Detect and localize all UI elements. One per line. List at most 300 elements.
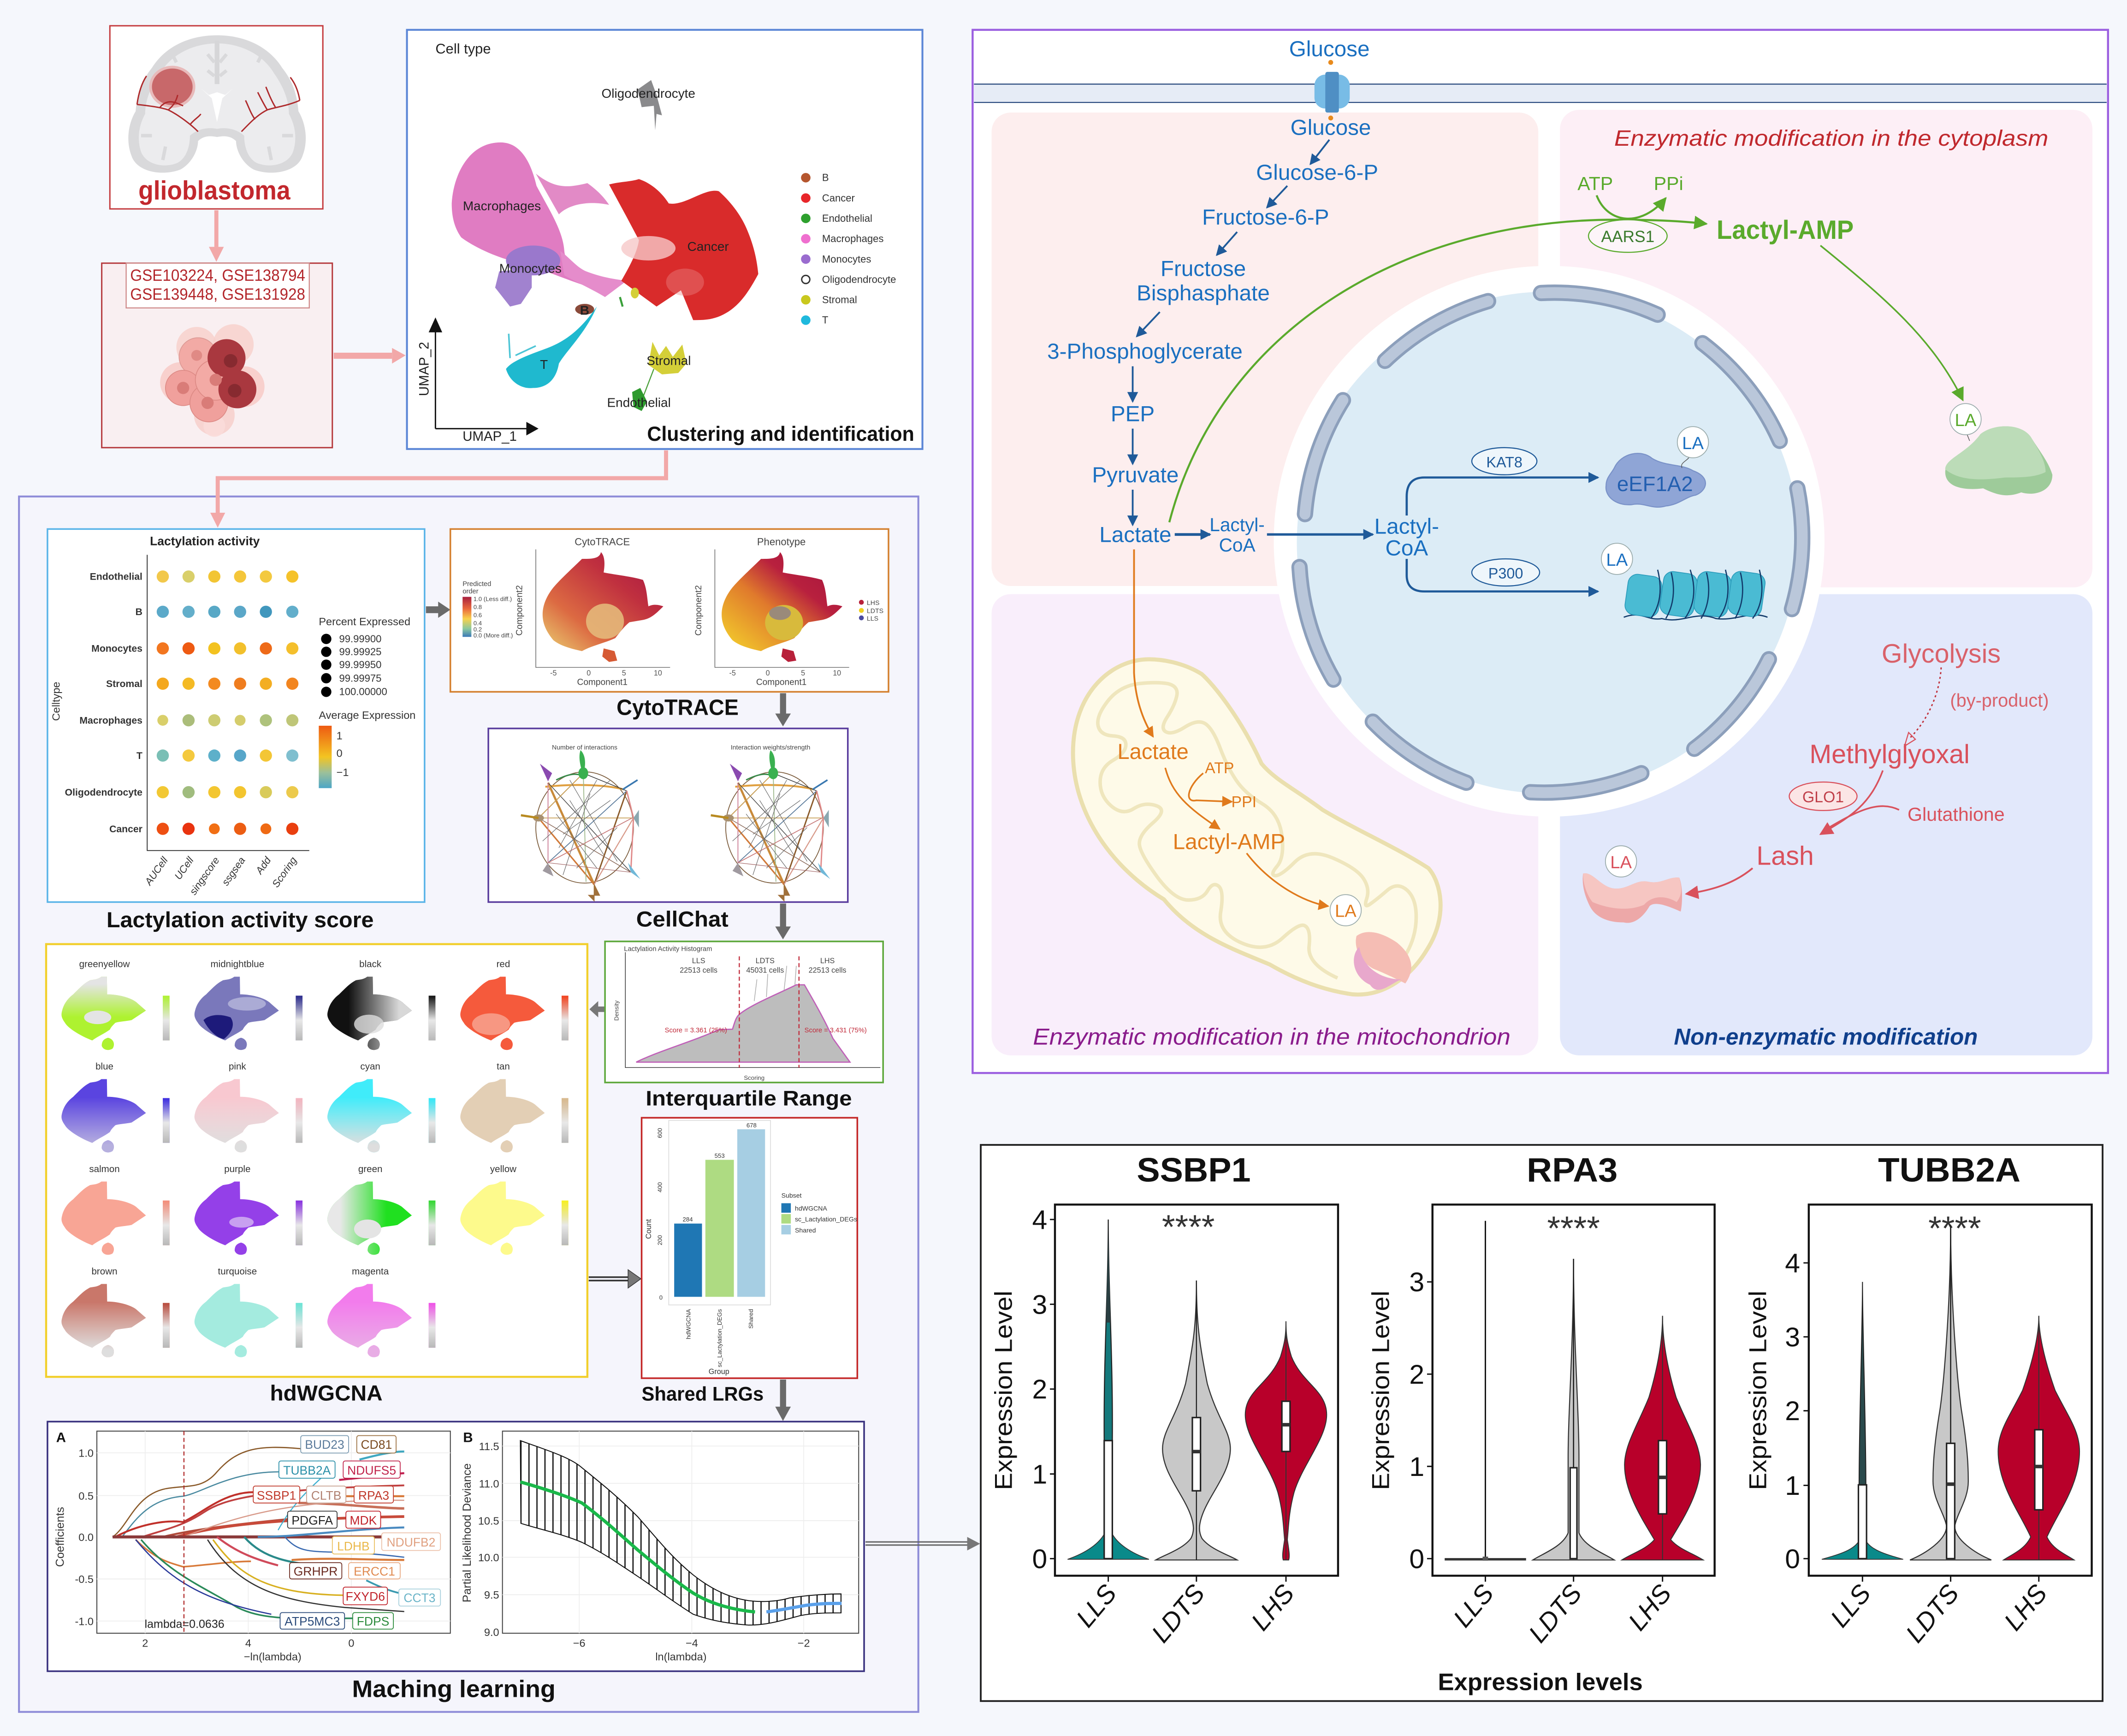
legend: percent expressed: 99.99900 xyxy=(339,633,381,645)
chart A: LASSO coefficient paths: A xyxy=(56,1430,66,1445)
label: LA on eEF1A2 xyxy=(1677,427,1708,468)
row labels: T xyxy=(136,751,142,761)
chart: histogram: 22513 cells xyxy=(809,966,847,974)
module: blue xyxy=(61,1061,170,1152)
arrow: CytoTRACE to CellChat xyxy=(775,693,791,726)
legend: predicted order: 0.4 xyxy=(474,620,482,627)
enzyme: KAT8 xyxy=(1472,448,1537,475)
heading: machine learning: Maching learning xyxy=(352,1675,556,1702)
mitochondrial labels and arrows: Lactate xyxy=(1117,739,1189,764)
enzyme: AARS1: AARS1 xyxy=(1601,228,1654,246)
chart: SSBP1 violins: 2 xyxy=(1032,1375,1047,1404)
label: LA on mitochondrial substrate: LA xyxy=(1335,901,1357,921)
cell membrane xyxy=(974,84,2107,102)
label: LA on green substrate: LA xyxy=(1955,410,1977,430)
chart: histogram: Scoring xyxy=(744,1074,764,1081)
glycolysis pathway text: 3-Phosphoglycerate xyxy=(1047,339,1243,364)
chart: TUBB2A violins: **** xyxy=(1928,1209,1981,1247)
chart: interaction weight network xyxy=(711,750,830,901)
y-axis title: Celltype xyxy=(50,682,62,721)
glycolysis pathway text: Lactyl- xyxy=(1209,514,1265,535)
module: purple xyxy=(195,1164,302,1255)
chart B: partial likelihood deviance: 10.0 xyxy=(478,1552,499,1564)
glycolysis pathway text xyxy=(1047,37,1439,561)
row labels: Endothelial xyxy=(90,572,142,582)
legend: phenotype groups: LHS xyxy=(867,599,879,606)
gene labels: NDUFS5 xyxy=(347,1463,396,1477)
module: purple: purple xyxy=(224,1164,250,1174)
chart: Phenotype map xyxy=(694,549,849,687)
module: pink: pink xyxy=(229,1061,246,1072)
gene labels: LDHB xyxy=(337,1540,370,1553)
chart: histogram: Density xyxy=(613,1000,620,1021)
chart: histogram: LDTS xyxy=(756,957,775,965)
label: LA on nucleosome xyxy=(1601,543,1633,575)
panel: glioblastoma xyxy=(110,26,323,209)
protein: eEF1A2: eEF1A2 xyxy=(1617,472,1693,496)
panel: analysis workflow xyxy=(19,497,918,1712)
legend: cell types: Endothelial xyxy=(822,213,872,224)
chart: CytoTRACE map: 5 xyxy=(622,669,626,677)
chart: TUBB2A violins: LHS xyxy=(1998,1579,2053,1636)
legend: cell types: Oligodendrocyte xyxy=(822,273,896,285)
panel: hdWGCNA xyxy=(46,944,587,1377)
arrow: machine learning to violin plots xyxy=(865,1537,980,1551)
module: yellow xyxy=(460,1164,569,1255)
chart: RPA3 violins: 1 xyxy=(1409,1452,1424,1482)
label: glioblastoma: glioblastoma xyxy=(138,176,291,205)
gene labels: ATP5MC3 xyxy=(284,1614,340,1628)
chart: gene count bars: Group xyxy=(709,1368,729,1376)
module: midnightblue xyxy=(195,959,302,1050)
gene labels: PDGFA xyxy=(291,1514,333,1528)
x-axis method labels: Add xyxy=(253,854,273,877)
non-enzymatic pathway: (by-product) xyxy=(1950,691,2049,711)
mitochondrial labels and arrows xyxy=(1117,739,1328,906)
panel: machine learning xyxy=(47,1422,864,1671)
chart: histogram: Score = 3.361 (25%) xyxy=(665,1027,727,1034)
legend: cell types xyxy=(801,172,896,326)
chart: UMAP clusters xyxy=(452,80,758,411)
dots xyxy=(157,570,298,835)
heading: enzymatic modification in the cytoplasm: Enzymatic modification in the cytoplasm xyxy=(1614,126,2048,151)
legend: cell types: Monocytes xyxy=(822,253,871,265)
chart A: LASSO coefficient paths: 1.0 xyxy=(78,1447,94,1459)
chart B: partial likelihood deviance: Partial Likelihood Deviance xyxy=(461,1463,474,1602)
legend: percent expressed: 100.00000 xyxy=(339,686,387,698)
legend: subset xyxy=(782,1192,857,1234)
legend: cell types: T xyxy=(822,314,828,326)
network titles xyxy=(552,743,810,751)
chart: SSBP1 violins: Expression Level xyxy=(990,1291,1018,1490)
gene labels: CCT3 xyxy=(403,1591,436,1605)
chart: SSBP1 violins xyxy=(990,1204,1338,1648)
label: LA on eEF1A2: LA xyxy=(1682,433,1704,453)
glycolysis pathway text: PEP xyxy=(1111,402,1155,426)
title: cell type: Cell type xyxy=(435,41,491,57)
enzyme: P300 xyxy=(1472,559,1540,586)
row labels: Macrophages xyxy=(79,716,142,726)
chart: SSBP1 violins: 4 xyxy=(1032,1205,1047,1235)
gene labels: MDK xyxy=(350,1514,377,1528)
gene labels: CLTB xyxy=(311,1488,341,1502)
module: tan: tan xyxy=(497,1061,510,1072)
legend: average expression: Average Expression xyxy=(319,709,415,721)
title: SSBP1: SSBP1 xyxy=(1137,1150,1250,1189)
chart: SSBP1 violins: 0 xyxy=(1032,1544,1047,1574)
panel: clustering and identification xyxy=(407,30,923,449)
glycolysis pathway text: Glucose xyxy=(1291,116,1371,140)
chart: SSBP1 violins: 3 xyxy=(1032,1290,1047,1320)
legend: predicted order: 0.8 xyxy=(474,604,482,610)
chart: gene count bars: Count xyxy=(645,1219,653,1239)
chart: TUBB2A violins: LLS xyxy=(1825,1579,1876,1633)
row labels xyxy=(65,572,142,835)
non-enzymatic pathway: Lash xyxy=(1756,841,1814,871)
cluster labels: Cancer xyxy=(687,239,729,254)
arrow: glioblastoma to datasets xyxy=(209,210,224,262)
glycolysis pathway text: CoA xyxy=(1219,534,1256,556)
legend: predicted order: order xyxy=(462,588,479,595)
legend: phenotype groups: LLS xyxy=(867,615,878,622)
x-axis method labels: singscore xyxy=(187,855,222,897)
x-axis method labels: ssgsea xyxy=(219,855,248,888)
module: yellow: yellow xyxy=(490,1164,516,1174)
panel: interquartile range xyxy=(605,942,883,1083)
enzyme: KAT8: KAT8 xyxy=(1486,454,1523,471)
legend: subset: Shared xyxy=(795,1226,816,1234)
chart: gene count bars: 284 xyxy=(683,1216,693,1223)
chart: Phenotype map: 0 xyxy=(766,669,770,677)
legend: percent expressed xyxy=(319,616,410,698)
chart A: LASSO coefficient paths xyxy=(53,1430,450,1663)
chart: gene count bars: 200 xyxy=(657,1235,664,1245)
mitochondrial labels and arrows: Lactyl-AMP xyxy=(1173,830,1285,854)
module: pink xyxy=(195,1061,302,1152)
quadrant: glycolysis xyxy=(992,113,1538,586)
panel: datasets xyxy=(102,263,332,448)
legend: subset: Subset xyxy=(782,1192,802,1199)
quadrant: non-enzymatic xyxy=(1560,594,2092,1055)
panel: CytoTRACE xyxy=(450,529,889,692)
network titles: Number of interactions xyxy=(552,743,617,751)
chart: histogram: LHS xyxy=(820,957,835,965)
glycolysis pathway text: Fructose xyxy=(1161,257,1246,281)
module: blue: blue xyxy=(95,1061,113,1072)
module: black: black xyxy=(359,959,382,970)
arrow: lactyl-AMP to LA xyxy=(1820,245,1963,400)
arrow: hdWGCNA to shared LRGs xyxy=(589,1270,641,1288)
ATP to PPi arc: PPi xyxy=(1654,173,1683,194)
gene labels: FDPS xyxy=(357,1614,389,1628)
heading: CellChat: CellChat xyxy=(636,907,729,931)
chart: RPA3 violins: 0 xyxy=(1409,1544,1424,1574)
chart: histogram xyxy=(613,952,880,1081)
module: green: green xyxy=(358,1164,382,1174)
non-enzymatic pathway: Glutathione xyxy=(1908,804,2005,825)
cluster labels: T xyxy=(540,357,548,372)
chart: gene count bars: 0 xyxy=(659,1294,663,1301)
glycolysis pathway text: Fructose-6-P xyxy=(1202,205,1329,230)
module: magenta xyxy=(327,1266,435,1357)
chart: RPA3 violins: **** xyxy=(1547,1209,1600,1247)
chart A: LASSO coefficient paths: -1.0 xyxy=(75,1615,94,1627)
legend: subset: sc_Lactylation_DEGs xyxy=(795,1215,857,1223)
glycolysis pathway text: Lactyl- xyxy=(1375,515,1439,539)
legend: phenotype groups xyxy=(859,599,883,622)
protein: eEF1A2 xyxy=(1606,453,1706,507)
cluster labels: B xyxy=(580,303,589,318)
chart A: LASSO coefficient paths: 0.5 xyxy=(78,1490,94,1502)
legend: cell types: Stromal xyxy=(822,294,857,306)
chart B: partial likelihood deviance: −2 xyxy=(798,1637,810,1649)
mitochondrial labels and arrows: ATP xyxy=(1205,759,1234,777)
chart A: LASSO coefficient paths: Coefficients xyxy=(53,1507,66,1567)
chart: gene count bars: Shared xyxy=(747,1309,754,1329)
chart: RPA3 violins: Expression Level xyxy=(1368,1291,1395,1490)
chart: Phenotype map: 10 xyxy=(833,669,841,677)
legend: cell types: B xyxy=(822,172,829,184)
quadrant: cytoplasm xyxy=(1560,110,2092,587)
chart: RPA3 violins: LDTS xyxy=(1523,1579,1587,1648)
chart: SSBP1 violins: LLS xyxy=(1070,1579,1122,1633)
glycolysis pathway text: CoA xyxy=(1385,536,1428,561)
chart A: LASSO coefficient paths: -0.5 xyxy=(75,1573,94,1585)
title: TUBB2A: TUBB2A xyxy=(1878,1150,2020,1189)
legend: percent expressed: 99.99975 xyxy=(339,672,381,684)
chart: gene count bars: hdWGCNA xyxy=(685,1309,692,1339)
legend: predicted order xyxy=(462,581,513,639)
module: cyan: cyan xyxy=(360,1061,380,1072)
chart B: partial likelihood deviance: 9.5 xyxy=(484,1589,499,1601)
gene labels: NDUFB2 xyxy=(386,1535,435,1549)
protein: pink substrate xyxy=(1583,873,1682,923)
x-axis method labels: AUCell xyxy=(142,854,171,888)
legend: percent expressed: 99.99950 xyxy=(339,659,381,670)
chart: RPA3 violins: LHS xyxy=(1622,1579,1677,1636)
gene labels: BUD23 xyxy=(305,1438,344,1452)
icon: glucose transporter xyxy=(1315,60,1350,120)
chart: SSBP1 violins: **** xyxy=(1162,1208,1215,1246)
chart: TUBB2A violins: 0 xyxy=(1785,1544,1800,1574)
chart B: partial likelihood deviance: −4 xyxy=(686,1637,698,1649)
chart: gene count bars: 400 xyxy=(657,1182,664,1192)
legend: average expression: −1 xyxy=(337,766,349,778)
module: black xyxy=(327,959,435,1050)
UMAP axes: UMAP_1 xyxy=(462,429,517,444)
network titles: Interaction weights/strength xyxy=(731,743,810,751)
heading: lactylation activity score: Lactylation activity score xyxy=(107,907,374,932)
module: brown xyxy=(61,1266,170,1357)
module: green xyxy=(327,1164,435,1255)
chart: CytoTRACE map: 0 xyxy=(587,669,591,677)
enzyme: AARS1 xyxy=(1588,220,1667,252)
chart: Phenotype map: 5 xyxy=(801,669,805,677)
chart B: partial likelihood deviance: 10.5 xyxy=(478,1515,499,1527)
chart: CytoTRACE map: -5 xyxy=(550,669,557,677)
non-enzymatic pathway xyxy=(1686,639,2049,894)
protein: green substrate xyxy=(1945,426,2052,495)
chart: SSBP1 violins: 1 xyxy=(1032,1459,1047,1489)
cluster labels xyxy=(463,86,729,410)
chart B: partial likelihood deviance: 11.5 xyxy=(479,1440,499,1452)
label: LA on mitochondrial substrate xyxy=(1330,895,1361,926)
module: greenyellow xyxy=(61,959,170,1050)
heading: CytoTRACE: CytoTRACE xyxy=(616,695,739,720)
enzyme: GLO1: GLO1 xyxy=(1802,788,1844,806)
chart axes xyxy=(147,555,309,851)
chart: TUBB2A violins: 3 xyxy=(1785,1322,1800,1352)
chart A: LASSO coefficient paths: 4 xyxy=(245,1637,251,1649)
chart: SSBP1 violins: LDTS xyxy=(1146,1579,1210,1648)
chart: CytoTRACE map: Component2 xyxy=(515,585,525,636)
chart: TUBB2A violins: 2 xyxy=(1785,1396,1800,1426)
arrow: clustering to analysis panel xyxy=(210,450,666,527)
panel: violin plots xyxy=(981,1145,2103,1701)
label: LA on pink substrate: LA xyxy=(1610,853,1632,872)
title: RPA3: RPA3 xyxy=(1527,1150,1617,1189)
chart: SSBP1 violins: LHS xyxy=(1245,1579,1300,1636)
chart: Phenotype map: Component2 xyxy=(694,585,704,636)
titles: CytoTRACE xyxy=(575,536,630,548)
legend: predicted order: Predicted xyxy=(462,581,491,588)
chart: histogram: LLS xyxy=(692,957,705,965)
module: turquoise: turquoise xyxy=(218,1266,257,1277)
chart: TUBB2A violins: 4 xyxy=(1785,1249,1800,1279)
chart: CytoTRACE map: Component1 xyxy=(577,678,628,687)
chart: Phenotype map: Component1 xyxy=(756,678,806,687)
cluster labels: Endothelial xyxy=(607,396,671,410)
chart: TUBB2A violins xyxy=(1744,1204,2092,1648)
heading: interquartile range: Interquartile Range xyxy=(646,1087,852,1110)
chart: TUBB2A violins: LDTS xyxy=(1900,1579,1964,1648)
ATP to PPi arc: ATP xyxy=(1577,173,1613,194)
glycolysis pathway text: Bisphasphate xyxy=(1137,281,1270,306)
chart: RPA3 violins: 3 xyxy=(1409,1268,1424,1298)
label: LA on green substrate xyxy=(1950,403,1981,441)
x-axis method labels: UCell xyxy=(172,854,196,882)
arrow: datasets to clustering xyxy=(334,348,406,363)
chart: histogram: 45031 cells xyxy=(746,966,784,974)
arrow: CellChat to IQR xyxy=(775,903,791,939)
chart: TUBB2A violins: Expression Level xyxy=(1744,1291,1772,1490)
UMAP axes xyxy=(417,317,539,444)
cluster labels: Macrophages xyxy=(463,199,541,213)
module: red: red xyxy=(497,959,510,970)
x-axis method labels xyxy=(142,854,299,897)
legend: predicted order: 0.6 xyxy=(474,612,482,619)
chart: interaction number network xyxy=(521,750,640,901)
dataset accession numbers: GSE103224, GSE138794 xyxy=(130,267,305,284)
legend: cell types: Cancer xyxy=(822,192,855,204)
module: turquoise xyxy=(195,1266,302,1357)
quadrant: mitochondrion xyxy=(992,594,1538,1055)
panel: lactylation dot plot xyxy=(47,529,425,902)
chart: TUBB2A violins: 1 xyxy=(1785,1471,1800,1501)
icon: brain with tumour xyxy=(128,35,306,173)
chart: gene count bars: 553 xyxy=(715,1152,725,1159)
glycolysis arrows xyxy=(1133,140,1598,592)
dataset accession numbers xyxy=(126,263,309,308)
module: greenyellow: greenyellow xyxy=(79,959,130,970)
chart: gene count bars: sc_Lactylation_DEGs xyxy=(716,1309,723,1367)
heading: enzymatic modification in the mitochondrion: Enzymatic modification in the mitochondrion xyxy=(1033,1024,1511,1049)
glycolysis pathway text: Glucose-6-P xyxy=(1256,160,1378,185)
gene labels: FXYD6 xyxy=(346,1590,385,1604)
chart: CytoTRACE map: 10 xyxy=(654,669,662,677)
icon: cell cluster xyxy=(160,324,265,437)
chart: histogram: Score = 3.431 (75%) xyxy=(805,1027,867,1034)
chart B: partial likelihood deviance xyxy=(461,1430,859,1663)
legend: predicted order: 0.0 (More diff.) xyxy=(474,632,513,639)
legend: percent expressed: 99.99925 xyxy=(339,646,381,658)
row labels: B xyxy=(136,607,142,617)
arrow: lactate to lactyl-AMP xyxy=(1169,219,1706,522)
arrow: IQR to hdWGCNA xyxy=(589,1001,605,1017)
row labels: Stromal xyxy=(106,679,142,689)
row labels: Oligodendrocyte xyxy=(65,787,142,798)
panel: shared LRGs xyxy=(642,1118,857,1378)
cluster labels: Monocytes xyxy=(499,261,562,275)
dataset accession numbers: GSE139448, GSE131928 xyxy=(130,285,305,303)
heading: clustering and identification: Clustering and identification xyxy=(647,423,914,445)
chart B: partial likelihood deviance: 11.0 xyxy=(479,1478,499,1490)
module: midnightblue: midnightblue xyxy=(211,959,264,970)
chart A: LASSO coefficient paths: 0 xyxy=(348,1637,355,1649)
heading: expression levels: Expression levels xyxy=(1438,1669,1643,1695)
row labels: Monocytes xyxy=(91,644,142,654)
UMAP axes: UMAP_2 xyxy=(417,342,432,396)
module: salmon: salmon xyxy=(89,1164,120,1174)
non-enzymatic pathway: Methylglyoxal xyxy=(1809,740,1970,769)
module: salmon xyxy=(61,1164,170,1255)
gene labels: SSBP1 xyxy=(257,1488,296,1502)
module: cyan xyxy=(327,1061,435,1152)
legend: predicted order: 1.0 (Less diff.) xyxy=(474,595,512,602)
chart B: partial likelihood deviance: 9.0 xyxy=(484,1626,499,1638)
gene labels xyxy=(253,1435,440,1629)
legend: cell types: Macrophages xyxy=(822,233,883,244)
heading: non-enzymatic modification: Non-enzymatic modification xyxy=(1674,1024,1978,1049)
chart A: LASSO coefficient paths: lambda=0.0636 xyxy=(145,1618,225,1630)
chart: histogram: 22513 cells xyxy=(680,966,717,974)
cluster labels: Oligodendrocyte xyxy=(602,86,695,101)
titles: Phenotype xyxy=(757,536,806,548)
module: brown: brown xyxy=(92,1266,118,1277)
arrow: lactate into mitochondrion xyxy=(1134,549,1153,736)
arrow: dot plot to CytoTRACE xyxy=(426,602,450,618)
chart: RPA3 violins: 2 xyxy=(1409,1360,1424,1390)
cluster labels: Stromal xyxy=(646,353,691,367)
glycolysis pathway text: Pyruvate xyxy=(1092,463,1179,487)
chart: RPA3 violins xyxy=(1368,1204,1715,1648)
nucleosome xyxy=(1624,570,1767,620)
chart: RPA3 violins: LLS xyxy=(1447,1579,1499,1633)
module: magenta: magenta xyxy=(352,1266,389,1277)
mitochondrion xyxy=(1073,659,1440,995)
legend: average expression: 1 xyxy=(337,729,343,741)
chart B: partial likelihood deviance: B xyxy=(463,1430,473,1445)
enzyme: GLO1 xyxy=(1789,782,1857,811)
titles xyxy=(575,536,806,548)
legend: predicted order: 0.2 xyxy=(474,626,482,633)
label: Lactyl-AMP green: Lactyl-AMP xyxy=(1717,215,1854,245)
glycolysis pathway text: Glucose xyxy=(1289,37,1370,61)
protein: pink mitochondrial substrate xyxy=(1354,932,1411,990)
chart: gene count bars: 678 xyxy=(747,1122,757,1129)
non-enzymatic pathway: Glycolysis xyxy=(1882,639,2001,669)
chart A: LASSO coefficient paths: 2 xyxy=(142,1637,148,1649)
